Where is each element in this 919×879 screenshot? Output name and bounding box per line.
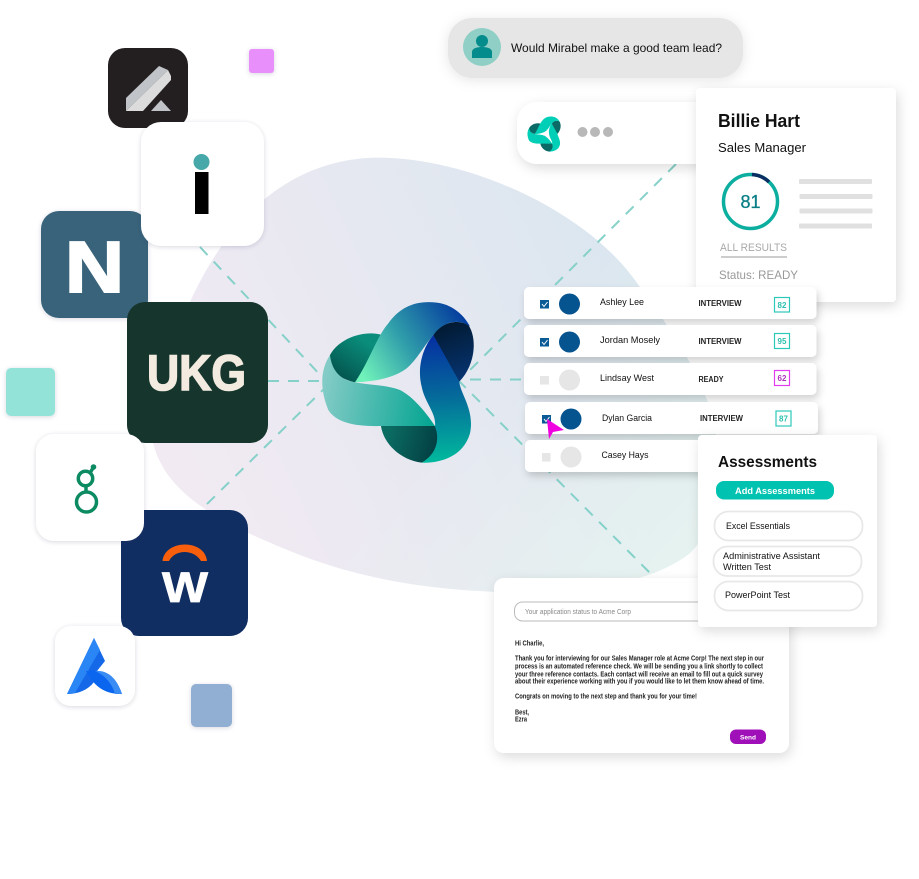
tile: Workday logo: W	[162, 564, 208, 612]
email body: process is an automated reference check. We will be sending you a link shortly to collect	[515, 664, 764, 670]
assessments card	[698, 435, 877, 627]
tile: UKG logo	[127, 302, 268, 443]
add button: Add Assessments	[735, 486, 815, 497]
score ring: 81	[740, 192, 760, 212]
dashed connector lines	[200, 164, 676, 575]
profile card: Billie Hart: Billie Hart	[718, 111, 800, 131]
item: Administrative Assistant Written Test: Written Test	[723, 562, 772, 572]
chat bubble: Would Mirabel make a good team lead?	[511, 41, 722, 55]
candidate row: Lindsay West	[524, 363, 816, 395]
typing dots	[578, 127, 613, 137]
item: Excel Essentials	[714, 512, 862, 540]
tile: i logo	[141, 122, 264, 246]
decorative square: blue	[191, 684, 232, 727]
add button	[716, 481, 834, 500]
send button	[730, 730, 766, 744]
email body: Best,	[515, 710, 529, 716]
placeholder lines	[799, 179, 872, 228]
candidate row: Casey Hays	[525, 440, 818, 472]
candidate row: Ashley Lee	[524, 287, 816, 319]
icon: user avatar	[463, 28, 501, 66]
item: Administrative Assistant Written Test	[714, 546, 862, 576]
score ring	[724, 174, 778, 228]
item: Administrative Assistant Written Test: Administrative Assistant	[723, 551, 820, 561]
decorative square: pink	[249, 49, 274, 73]
item: Excel Essentials: Excel Essentials	[726, 521, 790, 531]
chat bubble	[448, 18, 743, 78]
tile: N logo	[41, 211, 148, 318]
icon: small logo	[527, 116, 561, 152]
tile: UKG logo: UKG	[147, 345, 246, 401]
icon: magenta cursor	[547, 419, 564, 439]
email body: your three reference contacts. Each contact will receive an email to fill out a quick survey	[515, 672, 763, 678]
assessments card: Assessments	[718, 454, 817, 471]
candidate row: Casey Hays: Casey Hays	[602, 450, 649, 460]
profile card: Billie Hart: Status: READY	[719, 268, 798, 282]
subject field: Your application status to Acme Corp	[525, 609, 631, 616]
tile: Workday logo	[121, 510, 248, 636]
candidate row: Jordan Mosely: 95	[778, 337, 787, 346]
candidate row: Ashley Lee: Ashley Lee	[600, 297, 644, 307]
candidate row: Jordan Mosely	[524, 325, 816, 357]
profile card: Billie Hart: ALL RESULTS	[720, 242, 787, 254]
candidate row: Ashley Lee: 82	[778, 301, 787, 310]
item: PowerPoint Test	[714, 582, 862, 610]
item: PowerPoint Test: PowerPoint Test	[725, 590, 790, 600]
email body: about their experience working with you if you would like to let them know ahead of time.	[515, 678, 764, 686]
email body: Hi Charlie,	[515, 640, 544, 648]
send button: Send	[740, 734, 756, 742]
candidate row: Jordan Mosely: INTERVIEW	[698, 337, 742, 346]
decorative square: teal	[6, 368, 55, 416]
candidate row: Dylan Garcia	[525, 402, 818, 434]
email card	[494, 578, 789, 753]
background blob	[151, 158, 719, 592]
subject field	[514, 602, 764, 621]
central triknot logo	[322, 302, 474, 463]
typing indicator pill	[517, 102, 717, 164]
tile: N logo: N	[65, 228, 124, 308]
profile card: Billie Hart	[696, 88, 896, 302]
candidate row: Dylan Garcia: Dylan Garcia	[602, 413, 652, 423]
email body: Congrats on moving to the next step and thank you for your time!	[515, 694, 697, 700]
candidate row: Dylan Garcia: INTERVIEW	[700, 414, 743, 423]
email body	[515, 640, 764, 724]
candidate row: Lindsay West: Lindsay West	[600, 373, 655, 383]
candidate row: Lindsay West: READY	[698, 375, 724, 384]
email body: Thank you for interviewing for our Sales Manager role at Acme Corp! The next step in our	[515, 656, 764, 662]
email body: Ezra	[515, 716, 527, 724]
profile card: Billie Hart: Sales Manager	[718, 140, 807, 155]
tile: green g logo	[36, 434, 144, 541]
candidate row: Dylan Garcia: 87	[779, 414, 788, 424]
candidate row: Ashley Lee: INTERVIEW	[698, 299, 742, 308]
tile: pen logo	[108, 48, 188, 128]
candidate row: Jordan Mosely: Jordan Mosely	[600, 335, 661, 345]
tile: blue A logo	[55, 626, 135, 706]
candidate row: Lindsay West: 62	[778, 374, 787, 383]
